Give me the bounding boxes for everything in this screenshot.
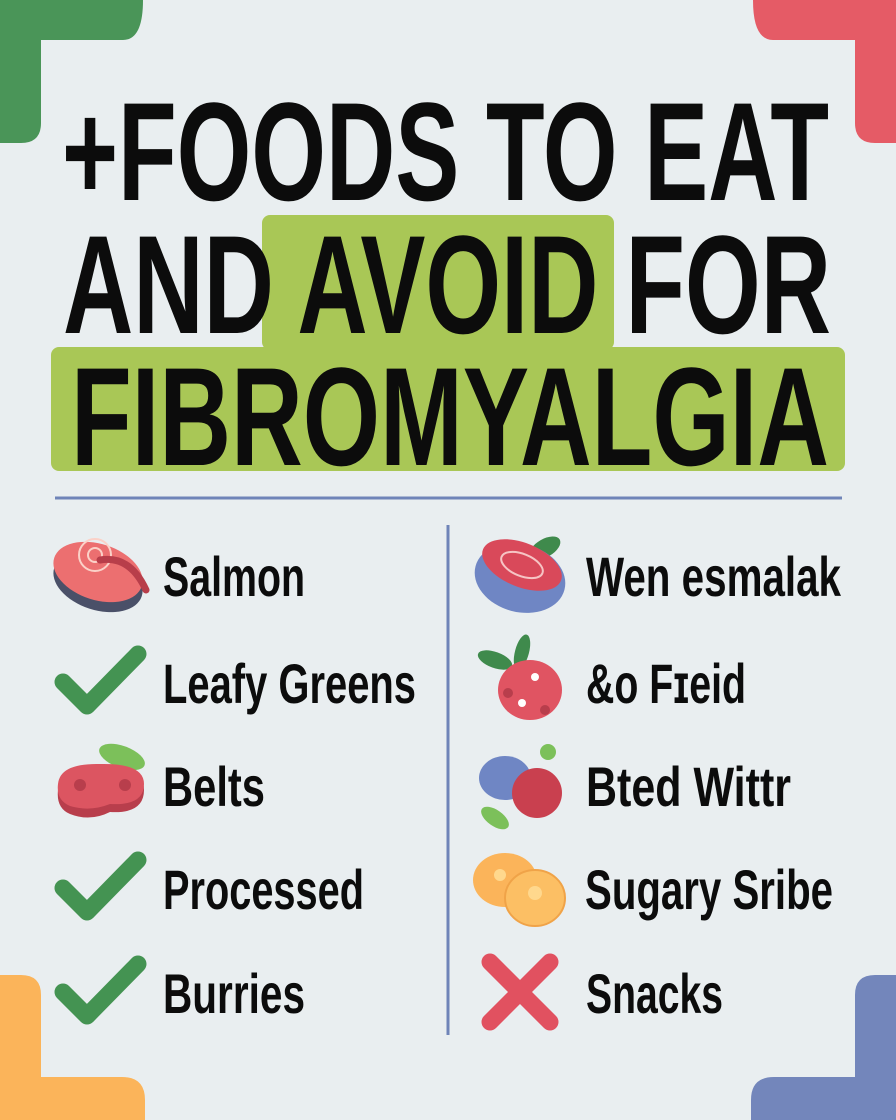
title xyxy=(62,73,831,495)
icon: check xyxy=(63,964,138,1016)
text: Belts: Belts xyxy=(163,755,265,818)
icon: red X xyxy=(490,962,550,1022)
icon: bowl xyxy=(467,529,573,623)
panel: right list xyxy=(467,529,842,1025)
text: Salmon: Salmon xyxy=(163,545,305,608)
text: Bted Wittr: Bted Wittr xyxy=(586,755,791,818)
icon: check xyxy=(63,654,138,706)
title highlight: FIBROMYALGIA xyxy=(51,347,845,471)
corner: green top-left xyxy=(0,0,143,143)
icon: beet slice xyxy=(58,738,148,818)
panel: left list xyxy=(46,531,416,1025)
text: Leafy Greens: Leafy Greens xyxy=(163,652,416,715)
icon: check xyxy=(63,860,138,912)
icon: salmon steak xyxy=(46,531,150,623)
corner: red top-right xyxy=(753,0,896,143)
text: Burries: Burries xyxy=(163,962,305,1025)
title highlight: AVOID xyxy=(262,215,614,350)
icon: orange slices xyxy=(473,853,565,926)
text: Snacks: Snacks xyxy=(586,962,723,1025)
corner: blue bottom-right xyxy=(751,975,896,1120)
text: Processed: Processed xyxy=(163,858,364,921)
text: &o Field: &o Fɪeid xyxy=(586,652,746,715)
icon: strawberry xyxy=(475,633,562,720)
corner: orange bottom-left xyxy=(0,975,145,1120)
icon: berries xyxy=(477,744,562,834)
